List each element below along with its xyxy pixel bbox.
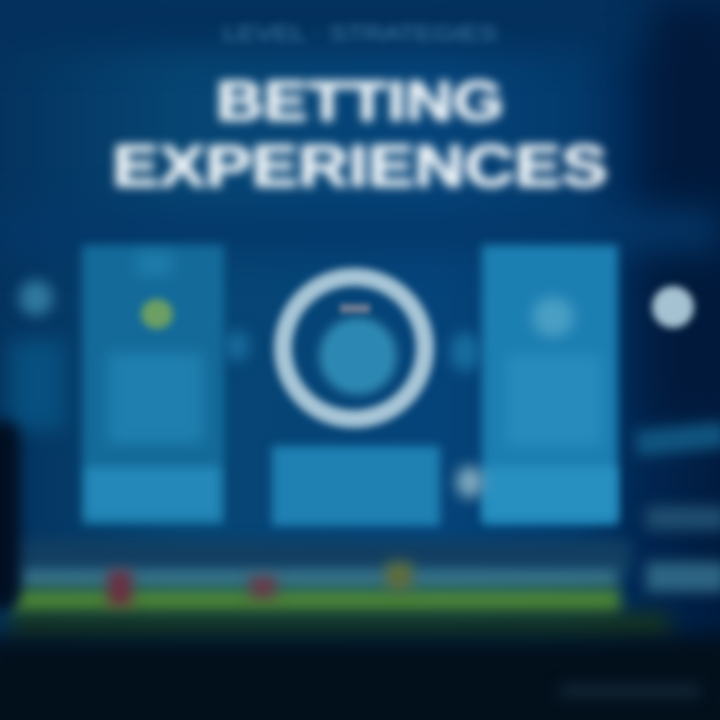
player 3	[386, 562, 412, 590]
icon: yellow badge	[141, 299, 173, 329]
eyebrow heading: LEVEL · STRATEGIES	[223, 21, 497, 46]
left side text	[10, 340, 65, 430]
field	[0, 580, 720, 720]
card footer	[484, 467, 616, 519]
title: EXPERIENCES	[112, 134, 608, 199]
right side row 2	[646, 562, 720, 592]
band: stands	[18, 570, 618, 586]
footer text right	[560, 684, 700, 698]
band: crowd	[10, 540, 630, 576]
players	[100, 554, 420, 614]
right side icon	[652, 286, 694, 328]
card text	[108, 353, 203, 443]
silhouette left	[0, 420, 20, 610]
player 2	[250, 576, 276, 598]
arrow: left to centre	[224, 330, 250, 362]
gauge centre	[316, 314, 400, 398]
gauge red mark	[340, 304, 370, 313]
icon: light badge	[532, 297, 574, 337]
title	[108, 69, 614, 199]
panel: right card	[476, 239, 626, 531]
dark ground	[0, 635, 720, 720]
panel: left card	[77, 240, 229, 530]
title: BETTING	[216, 69, 504, 132]
panel: centre card	[272, 446, 440, 526]
card heading	[137, 253, 172, 275]
gauge ring	[268, 262, 440, 434]
card footer	[86, 467, 220, 519]
field shadow	[10, 613, 670, 641]
card text	[506, 355, 601, 445]
left side icon	[19, 280, 53, 316]
right side bars	[630, 414, 720, 600]
arrow: centre to right	[450, 332, 480, 372]
right side row	[646, 506, 720, 530]
icon: small circle	[456, 466, 484, 498]
